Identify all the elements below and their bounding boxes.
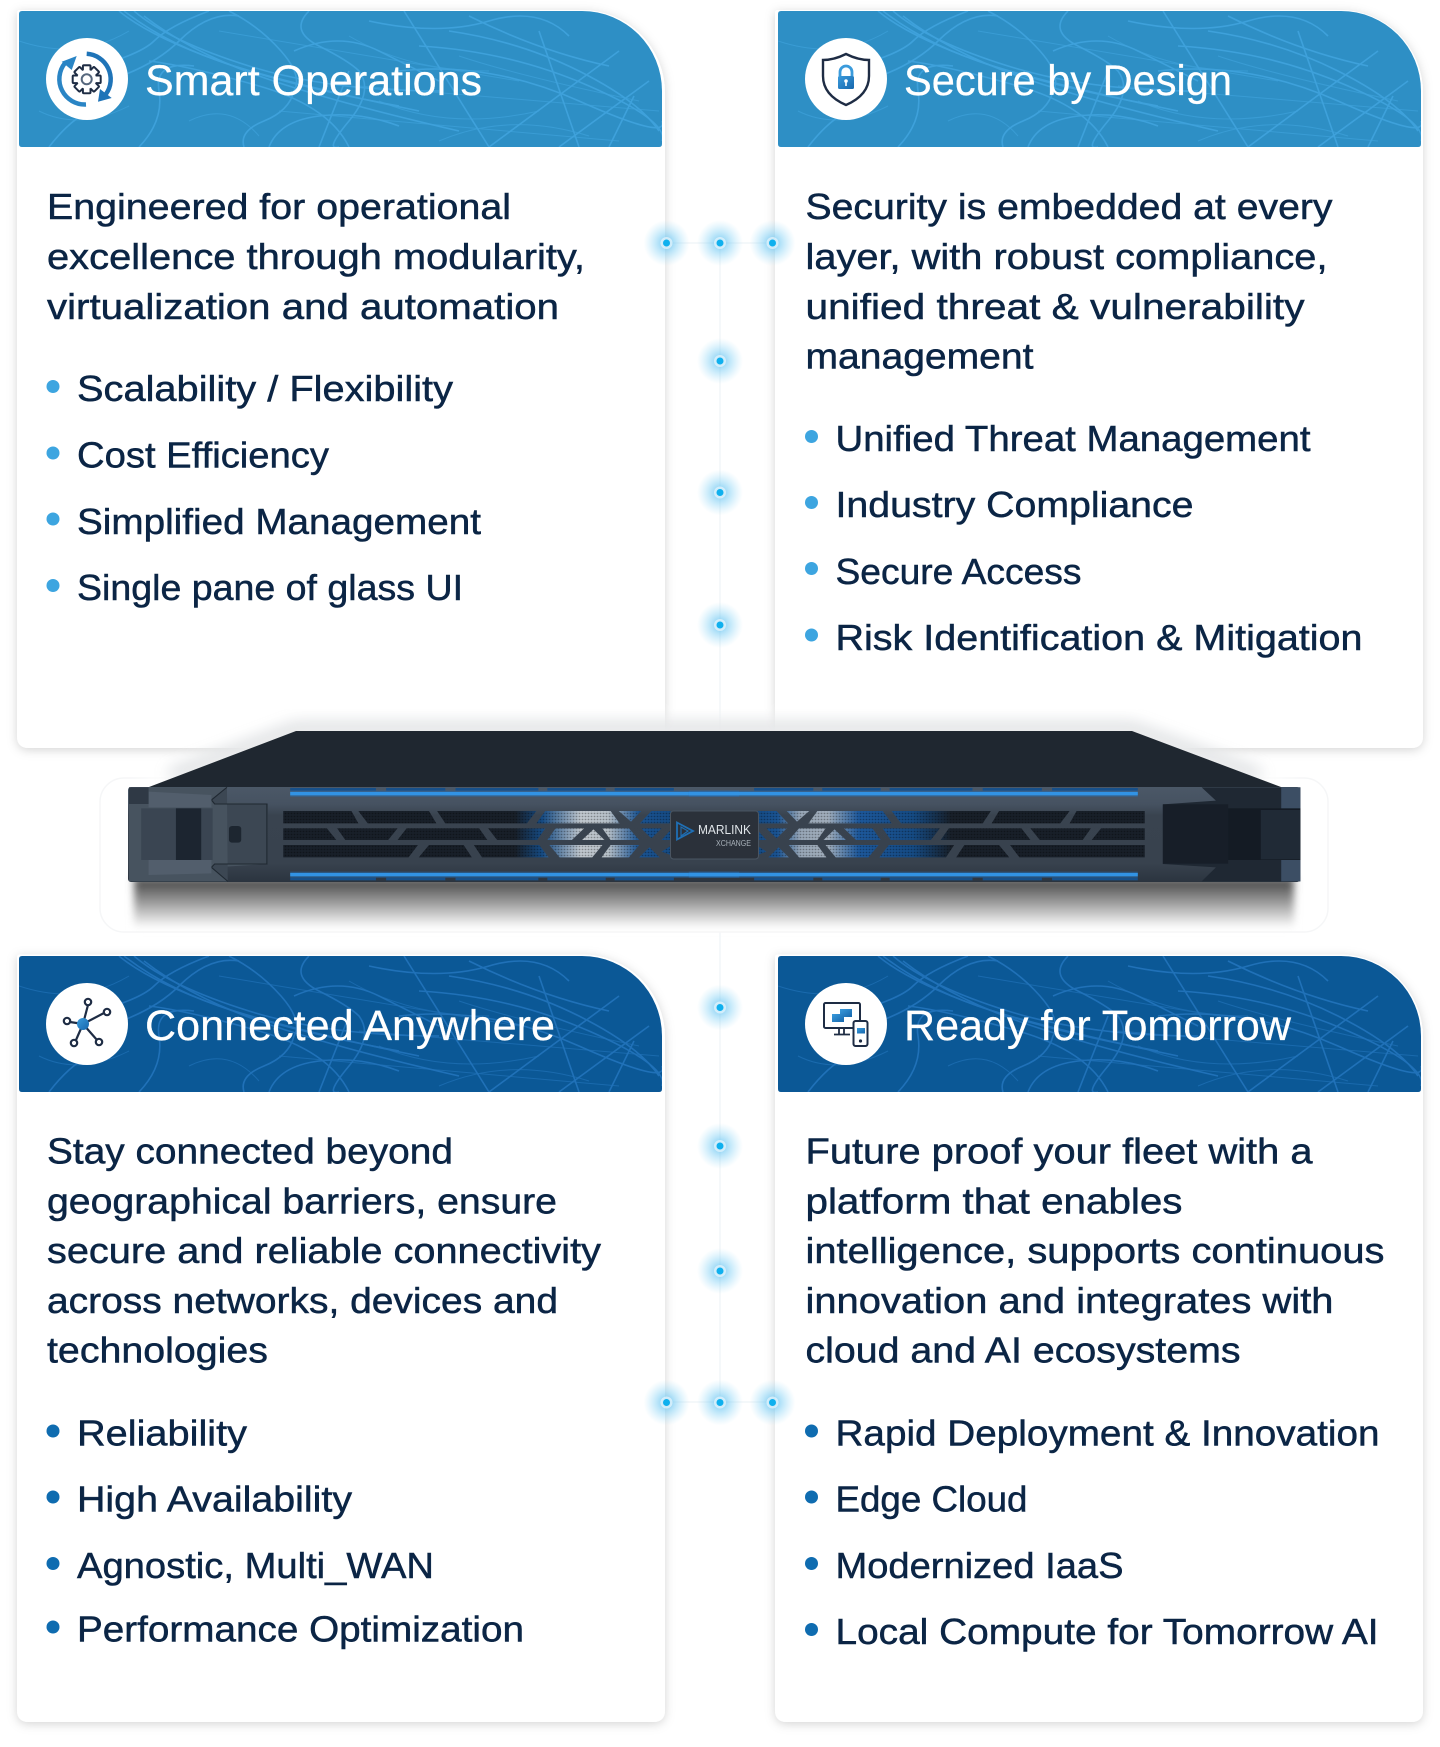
description: unified threat & vulnerability bbox=[806, 286, 1305, 327]
panel: Smart Operations bbox=[17, 10, 665, 748]
left handle bbox=[129, 787, 268, 881]
connector lines and glowing dots bbox=[644, 220, 796, 1426]
feature list: Industry Compliance bbox=[836, 484, 1194, 525]
header band bbox=[19, 11, 663, 147]
feature list: Performance Optimization bbox=[77, 1608, 524, 1650]
server drop shadow bbox=[134, 878, 1294, 928]
feature list: Modernized IaaS bbox=[836, 1545, 1124, 1586]
feature list: Local Compute for Tomorrow AI bbox=[836, 1611, 1378, 1652]
description: Security is embedded at every bbox=[806, 186, 1333, 227]
card background bbox=[17, 954, 665, 1722]
logo badge: MARLINK bbox=[698, 822, 751, 837]
description bbox=[47, 186, 585, 327]
halo behind server bbox=[100, 726, 1328, 932]
vent grille and light bars bbox=[283, 788, 1145, 880]
description bbox=[806, 186, 1333, 376]
description bbox=[806, 1130, 1384, 1370]
description: Engineered for operational bbox=[47, 186, 511, 227]
right handle bbox=[1163, 787, 1300, 881]
feature list: Simplified Management bbox=[77, 501, 481, 542]
header band bbox=[778, 956, 1422, 1092]
feature list bbox=[805, 418, 1362, 658]
description: platform that enables bbox=[806, 1180, 1182, 1222]
description: excellence through modularity, bbox=[47, 236, 585, 277]
heading: Ready for Tomorrow bbox=[904, 1002, 1292, 1050]
feature list: Unified Threat Management bbox=[836, 418, 1310, 459]
description: across networks, devices and bbox=[47, 1280, 558, 1321]
feature list: Reliability bbox=[77, 1412, 248, 1454]
panel: Secure by Design bbox=[775, 10, 1423, 748]
feature list: Risk Identification & Mitigation bbox=[836, 617, 1362, 658]
panel: Ready for Tomorrow bbox=[775, 954, 1423, 1722]
description: management bbox=[806, 336, 1034, 376]
feature list: Cost Efficiency bbox=[77, 434, 330, 476]
description: Future proof your fleet with a bbox=[806, 1130, 1313, 1172]
description bbox=[47, 1130, 602, 1370]
feature list: Agnostic, Multi_WAN bbox=[77, 1545, 434, 1586]
card background bbox=[775, 954, 1423, 1722]
icon: monitor and phone bbox=[805, 983, 887, 1065]
header band bbox=[19, 956, 663, 1092]
feature list: Scalability / Flexibility bbox=[77, 368, 454, 409]
icon: gear with circular arrows bbox=[46, 38, 128, 120]
card background bbox=[775, 10, 1423, 748]
feature list bbox=[46, 368, 481, 608]
panel: Connected Anywhere bbox=[17, 954, 665, 1722]
heading: Connected Anywhere bbox=[145, 1002, 555, 1050]
description: innovation and integrates with bbox=[806, 1280, 1334, 1321]
feature list: High Availability bbox=[77, 1478, 353, 1520]
heading: Smart Operations bbox=[145, 57, 482, 105]
server appliance: Marlink XChange bbox=[100, 726, 1328, 932]
description: cloud and AI ecosystems bbox=[806, 1330, 1240, 1370]
description: technologies bbox=[47, 1330, 268, 1370]
description: intelligence, supports continuous bbox=[806, 1230, 1384, 1271]
front panel bbox=[128, 787, 1300, 882]
description: layer, with robust compliance, bbox=[806, 236, 1328, 277]
logo badge bbox=[670, 811, 758, 859]
description: secure and reliable connectivity bbox=[47, 1230, 602, 1271]
description: virtualization and automation bbox=[47, 286, 559, 327]
icon: network nodes bbox=[46, 983, 128, 1065]
feature list: Rapid Deployment & Innovation bbox=[836, 1412, 1380, 1454]
feature list: Single pane of glass UI bbox=[77, 567, 463, 608]
card background bbox=[17, 10, 665, 748]
description: Stay connected beyond bbox=[47, 1130, 453, 1172]
logo badge: XCHANGE bbox=[716, 838, 751, 848]
feature list bbox=[46, 1412, 524, 1650]
heading: Secure by Design bbox=[904, 57, 1232, 105]
description: geographical barriers, ensure bbox=[47, 1180, 557, 1222]
chassis top bbox=[149, 731, 1281, 787]
feature list bbox=[805, 1412, 1380, 1652]
icon: shield with padlock bbox=[805, 38, 887, 120]
feature list: Secure Access bbox=[836, 551, 1082, 592]
feature list: Edge Cloud bbox=[836, 1478, 1028, 1520]
header band bbox=[778, 11, 1422, 147]
